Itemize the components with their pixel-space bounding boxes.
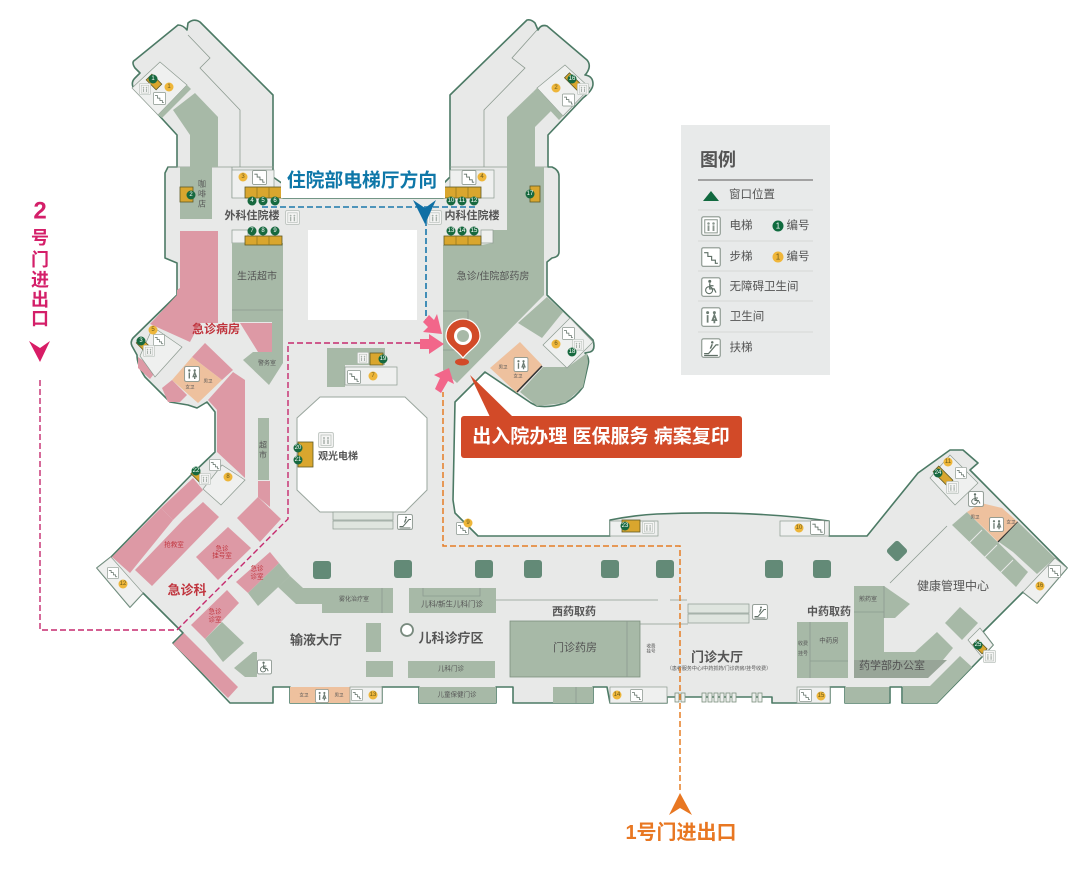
room labels xyxy=(164,178,1016,698)
gold stair numbers: 16 xyxy=(1037,583,1044,589)
pharmacy inner lines xyxy=(443,311,468,350)
pillars xyxy=(313,540,908,579)
inpatient direction text: 住院部电梯厅方向 xyxy=(287,168,437,190)
gold stair numbers: 6 xyxy=(554,341,558,347)
central core xyxy=(327,348,385,387)
blue arrowhead xyxy=(413,200,436,224)
green elevator numbers: 18 xyxy=(569,349,576,355)
gold stair numbers: 3 xyxy=(241,174,245,180)
gold stair numbers: 8 xyxy=(226,474,230,480)
green elevator numbers: 15 xyxy=(471,228,478,234)
gold stair numbers: 15 xyxy=(818,693,825,699)
left top core xyxy=(132,62,187,115)
room labels: 男卫 xyxy=(204,378,213,384)
building outline xyxy=(97,20,1067,703)
right end cores xyxy=(1023,558,1067,603)
atrium xyxy=(297,397,427,512)
room labels: 抢救室 xyxy=(164,540,184,548)
green elevator numbers: 4 xyxy=(250,198,254,204)
door 1 arrowhead xyxy=(669,793,692,815)
gold stair numbers: 11 xyxy=(945,459,952,465)
room labels: 店 xyxy=(198,198,206,208)
room labels: 外科住院楼 xyxy=(224,208,280,222)
room labels: 急诊病房 xyxy=(192,321,240,336)
green elevator numbers: 6 xyxy=(273,198,277,204)
room labels: 儿童保健门诊 xyxy=(438,690,477,698)
room labels: 挂号 xyxy=(646,648,656,654)
door 2 label: 口 xyxy=(31,309,49,329)
inpatient elevator hall label xyxy=(281,165,445,198)
legend: toilet: 卫生间 xyxy=(730,309,764,323)
room labels: 收费 xyxy=(646,642,656,650)
elevator lobby left xyxy=(232,170,274,198)
room labels: 超 xyxy=(259,440,267,450)
room labels: 女卫 xyxy=(300,692,309,698)
green elevator numbers: 10 xyxy=(448,198,455,204)
upper right wing room xyxy=(507,92,552,230)
legend: window: 窗口位置 xyxy=(729,187,775,201)
legend: accessible toilet xyxy=(702,278,798,296)
peach toilets right xyxy=(490,342,542,393)
green elevator numbers: 16 xyxy=(569,76,576,82)
room labels: 挂号 xyxy=(798,650,808,657)
room labels: 儿科诊疗区 xyxy=(418,630,484,646)
room labels: 雾化治疗室 xyxy=(339,595,369,603)
lower right wing rooms xyxy=(518,297,588,406)
room labels: 啡 xyxy=(198,188,206,198)
gold elevators xyxy=(136,73,987,654)
left mid core xyxy=(203,465,245,505)
room labels: 急诊 xyxy=(208,606,222,616)
room labels: 中药取药 xyxy=(807,604,851,618)
room labels: 药学部办公室 xyxy=(859,658,925,672)
green elevator numbers: 20 xyxy=(295,445,302,451)
room labels: 女卫 xyxy=(514,372,523,380)
service hex room xyxy=(243,352,283,385)
blue route to inpatient elevator hall xyxy=(262,200,475,323)
green elevator numbers: 23 xyxy=(622,523,629,529)
room labels: 急诊 xyxy=(216,544,229,552)
green elevator numbers: 12 xyxy=(471,198,478,204)
room labels: 门诊药房 xyxy=(553,640,597,654)
green elevator numbers: 13 xyxy=(448,228,455,234)
gold stair numbers: 13 xyxy=(370,692,377,698)
courtyard xyxy=(308,230,417,320)
gold stair numbers: 14 xyxy=(614,692,621,698)
icons xyxy=(107,83,1061,702)
room labels: 儿科/新生儿科门诊 xyxy=(421,598,484,608)
escalators xyxy=(333,512,749,623)
room labels: 诊室 xyxy=(250,572,264,580)
room labels: 西药取药 xyxy=(552,604,596,618)
gold stair numbers: 4 xyxy=(480,174,484,180)
room labels: 急诊科 xyxy=(167,582,207,598)
inner wing lines xyxy=(168,30,547,198)
gold stair numbers: 9 xyxy=(466,520,470,526)
legend: elevator xyxy=(702,217,810,235)
green elevator numbers: 17 xyxy=(527,191,534,197)
room labels: 女卫 xyxy=(1006,518,1016,526)
left lower core xyxy=(140,327,182,377)
lower left core xyxy=(97,557,143,607)
green elevator numbers: 25 xyxy=(975,642,982,648)
callout box xyxy=(461,416,742,458)
door 2 route xyxy=(40,343,425,630)
green elevator numbers: 1 xyxy=(151,76,155,82)
green elevator numbers: 14 xyxy=(459,228,466,234)
room labels: 诊室 xyxy=(208,614,222,624)
room labels: 挂号室 xyxy=(212,550,232,560)
door 2 arrowhead xyxy=(29,341,50,362)
legend: escalator xyxy=(702,339,752,357)
legend: elevator: 编号 xyxy=(786,218,810,232)
gold stair numbers: 12 xyxy=(120,581,127,587)
room labels: 儿科门诊 xyxy=(438,664,464,672)
green elevator numbers: 22 xyxy=(193,468,200,474)
door 2 label: 出 xyxy=(31,290,49,310)
gold stair numbers: 10 xyxy=(796,525,803,531)
legend: elevator: 电梯 xyxy=(730,219,752,232)
door 1 route xyxy=(443,392,680,790)
green elevator numbers: 24 xyxy=(935,470,942,476)
west green rooms xyxy=(278,576,322,604)
green elevator numbers: 9 xyxy=(273,228,277,234)
green elevator numbers: 21 xyxy=(295,457,302,463)
room labels: 男卫 xyxy=(334,692,344,698)
legend: escalator: 扶梯 xyxy=(730,340,752,354)
legend: accessible toilet: 无障碍卫生间 xyxy=(730,279,798,293)
gold stair numbers: 7 xyxy=(371,373,375,379)
green elevator numbers: 19 xyxy=(380,356,387,362)
right stairs core xyxy=(543,318,593,368)
emergency department rooms xyxy=(112,508,173,573)
upper left wing room xyxy=(173,93,218,167)
bottom right stair box xyxy=(610,687,667,703)
legend title: 图例 xyxy=(700,150,736,170)
door 2 label: 门 xyxy=(31,250,49,270)
supermarket room xyxy=(232,243,283,352)
door 2 label: 进 xyxy=(31,270,49,290)
outpatient pharmacy room xyxy=(510,621,640,677)
room labels: 男卫 xyxy=(498,364,508,370)
bottom toilets xyxy=(290,687,350,703)
pink arrows to window xyxy=(420,314,454,393)
room labels: 咖 xyxy=(198,178,206,188)
green elevator numbers: 7 xyxy=(250,228,254,234)
legend: toilet xyxy=(702,308,764,326)
room labels: 观光电梯 xyxy=(318,450,358,462)
green elevator numbers: 2 xyxy=(189,192,193,198)
entrance doors xyxy=(675,693,762,702)
elevator lobby right xyxy=(450,170,494,198)
legend: stairs: 1 xyxy=(776,252,781,262)
door 1 label: 1号门进出口 xyxy=(625,821,737,844)
gold stair numbers: 5 xyxy=(151,327,155,333)
supermarket strip xyxy=(258,418,269,480)
door 2 label: 2 xyxy=(33,198,47,224)
callout box: 出入院办理 医保服务 病案复印 xyxy=(472,424,730,448)
right top core xyxy=(537,65,590,116)
green elevator numbers: 5 xyxy=(261,198,265,204)
legend: stairs: 步梯 xyxy=(730,250,752,263)
legend: stairs xyxy=(702,248,810,266)
green elevator numbers xyxy=(136,74,982,650)
door 2 label: 号 xyxy=(31,228,49,248)
room labels: （患者服务中心/中药抓药/门诊药房/挂号收费） xyxy=(667,665,771,672)
room labels: 健康管理中心 xyxy=(917,578,989,593)
room labels: 急诊 xyxy=(250,564,264,572)
gold stair numbers: 1 xyxy=(167,84,171,90)
legend: stairs: 编号 xyxy=(786,249,810,263)
door 2 label xyxy=(31,198,49,329)
room labels: 警务室 xyxy=(258,359,276,367)
location pin xyxy=(446,319,480,366)
legend: elevator: 1 xyxy=(776,222,781,230)
gold stair numbers xyxy=(118,82,1044,700)
room labels: 门诊大厅 xyxy=(691,650,743,664)
pharmacy office xyxy=(854,586,953,678)
pharmacy room xyxy=(443,230,544,383)
legend panel xyxy=(681,125,830,375)
cafe xyxy=(180,167,212,219)
green elevator numbers: 11 xyxy=(459,198,466,204)
room labels: 内科住院楼 xyxy=(444,208,500,222)
room labels: 急诊/住院部药房 xyxy=(457,270,529,282)
legend: window xyxy=(703,187,775,201)
chinese medicine pharmacy xyxy=(797,622,848,678)
emergency ward pink xyxy=(150,231,218,342)
room labels: 男卫 xyxy=(970,514,980,520)
callout pointer xyxy=(470,375,513,417)
room labels: 收费 xyxy=(798,640,808,647)
room labels: 输液大厅 xyxy=(290,632,342,648)
room labels: 女卫 xyxy=(186,384,195,390)
gold stair numbers: 2 xyxy=(554,85,558,91)
green elevator numbers: 8 xyxy=(261,228,265,234)
room labels: 中药房 xyxy=(819,636,839,644)
room labels: 煎药室 xyxy=(859,595,877,603)
pediatric ring xyxy=(401,624,413,636)
left ward rooms xyxy=(192,343,233,380)
floor plan xyxy=(97,20,1067,703)
green elevator numbers: 3 xyxy=(139,338,143,344)
room labels: 市 xyxy=(259,450,267,460)
room labels: 生活超市 xyxy=(237,270,277,282)
health centre rooms xyxy=(952,512,1028,587)
